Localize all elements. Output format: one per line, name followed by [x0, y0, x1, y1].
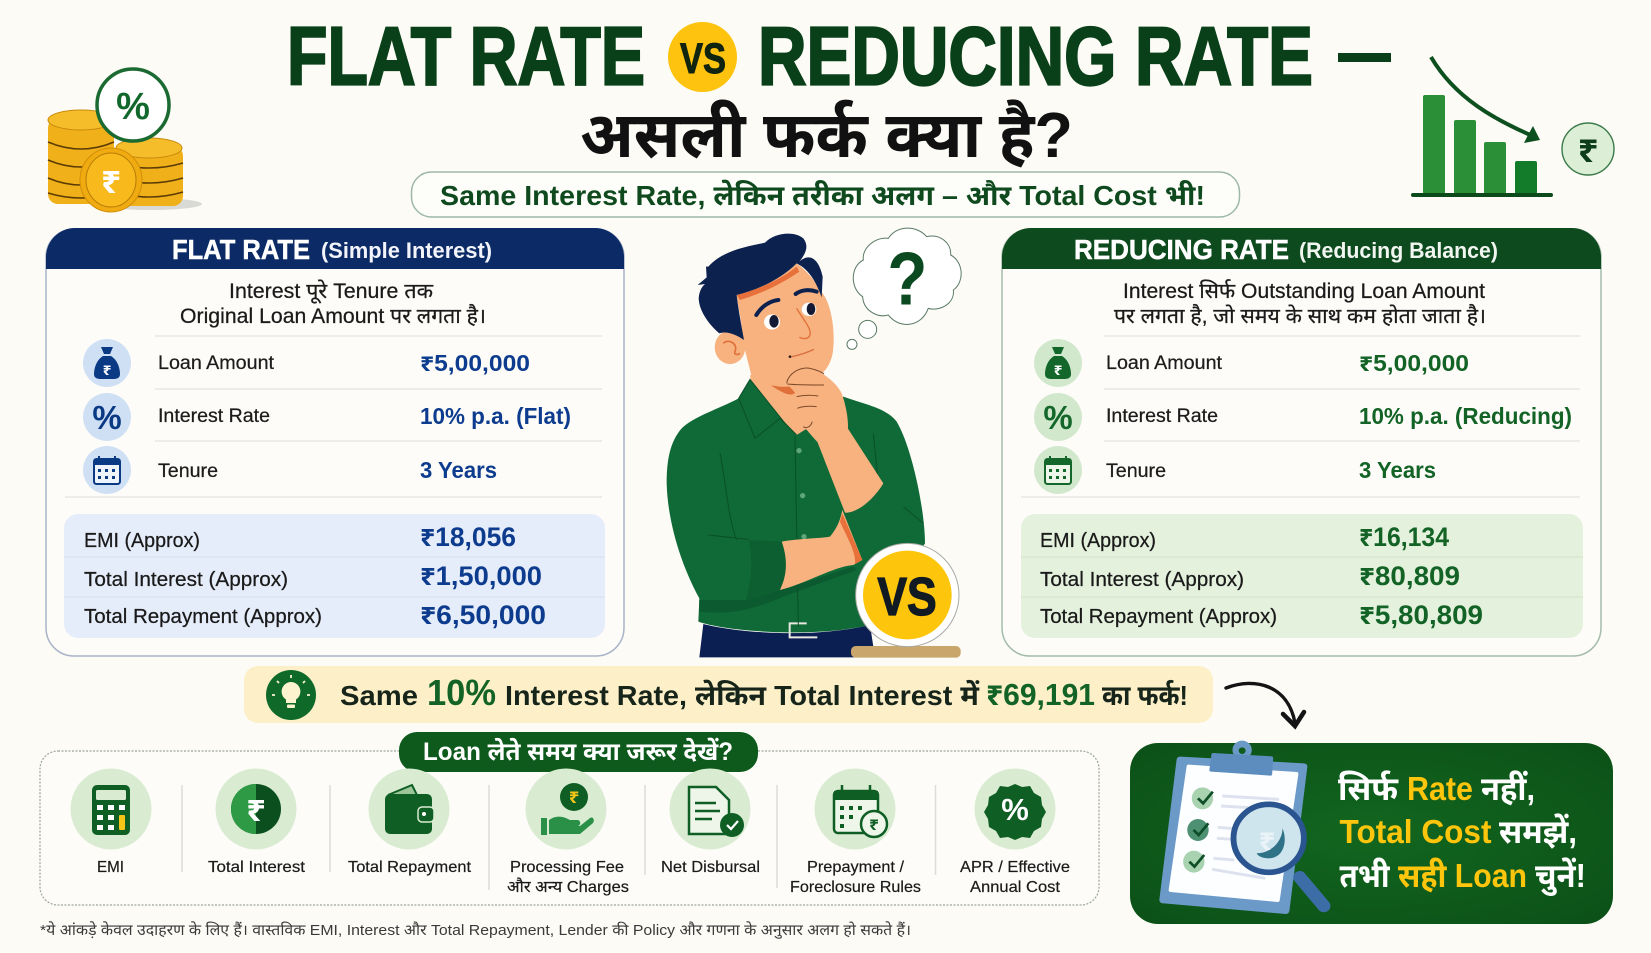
icon: percent	[1034, 393, 1082, 441]
flat rate header: (Simple Interest)	[321, 238, 492, 263]
front rupee coin: ₹	[101, 162, 121, 201]
collar	[739, 379, 797, 438]
item: total repayment	[348, 768, 472, 876]
icon: percent	[83, 393, 131, 441]
icon: calendar	[1034, 446, 1082, 494]
title: flat rate: FLAT RATE	[287, 10, 645, 102]
subtitle pill: Same Interest Rate, लेकिन तरीका अलग – और Total Cost भी!	[440, 178, 1205, 211]
reducing rate header	[1002, 228, 1601, 269]
item: processing fee	[507, 768, 629, 896]
item: prepayment rules: Foreclosure Rules	[790, 879, 921, 896]
reducing rate description: पर लगता है, जो समय के साथ कम होता जाता है।	[1114, 303, 1486, 328]
panel: flat rate	[46, 228, 624, 656]
right coin stack	[116, 138, 183, 206]
item: total repayment: Total Repayment	[348, 859, 472, 876]
reducing rate results box: ₹16,134	[1359, 522, 1449, 552]
flat rate results box: ₹1,50,000	[420, 561, 542, 591]
takeaway text: सही Loan	[1398, 857, 1527, 894]
reducing rate results box: ₹5,80,809	[1359, 600, 1483, 630]
icon: clipboard with magnifier: ₹	[1259, 825, 1275, 857]
item: total interest	[208, 768, 306, 876]
flat rate results box: Total Repayment (Approx)	[84, 606, 322, 628]
flat rate inputs: Interest Rate	[158, 406, 270, 427]
item: net disbursal: Net Disbursal	[661, 859, 760, 876]
title: reducing rate: REDUCING RATE	[758, 10, 1313, 102]
takeaway text: तभी	[1340, 857, 1391, 894]
icon: rupee circle: ₹	[1578, 129, 1598, 170]
icon: money bag	[83, 339, 131, 387]
item: apr	[960, 768, 1070, 896]
icon: vs badge small: VS	[680, 35, 726, 83]
face	[737, 263, 834, 387]
arrow: decline	[1431, 57, 1540, 143]
neck	[750, 375, 810, 435]
item: total interest: Total Interest	[208, 859, 306, 876]
thought bubble	[847, 228, 961, 349]
reducing rate results box: Total Interest (Approx)	[1040, 569, 1244, 591]
flat rate inputs	[158, 350, 571, 483]
reducing rate description: Interest सिर्फ Outstanding Loan Amount	[1123, 279, 1485, 303]
percent circle	[97, 69, 169, 141]
flat rate inputs: Tenure	[158, 461, 218, 482]
raised forearm and hand	[787, 368, 883, 513]
ear	[715, 331, 745, 364]
reducing rate header: (Reducing Balance)	[1299, 238, 1498, 263]
flat rate results box: EMI (Approx)	[84, 530, 200, 552]
icon: falling bar chart	[1411, 57, 1614, 197]
flat rate results box: ₹18,056	[420, 522, 516, 552]
illustration: thinking man	[667, 228, 961, 658]
reducing rate inputs: ₹5,00,000	[1359, 350, 1469, 376]
takeaway text: Rate	[1407, 770, 1473, 807]
reducing rate inputs: Loan Amount	[1106, 353, 1223, 374]
takeaway text: चुनें!	[1535, 857, 1586, 897]
flat rate results box: ₹6,50,000	[420, 600, 546, 630]
callout: interest difference: Interest Rate, लेकिन Total Interest में	[505, 678, 980, 711]
belt buckle	[790, 623, 817, 637]
eyes and brows	[756, 290, 817, 358]
flat rate inputs: 10% p.a. (Flat)	[420, 403, 571, 429]
reducing rate results box: ₹80,809	[1359, 561, 1460, 591]
icon: gold coins with percent	[48, 69, 202, 212]
reducing rate results box: EMI (Approx)	[1040, 530, 1156, 552]
icon: calendar	[83, 446, 131, 494]
icon: percent: %	[92, 399, 122, 436]
takeaway text: सिर्फ	[1338, 770, 1399, 807]
reducing rate results box: Total Repayment (Approx)	[1040, 606, 1277, 628]
item: EMI	[70, 768, 152, 876]
item: processing fee: ₹	[569, 787, 579, 807]
icon: money bag	[1034, 339, 1082, 387]
item: processing fee: Processing Fee	[510, 859, 624, 876]
shirt	[667, 379, 925, 632]
icon: vs badge small	[668, 22, 737, 92]
panel: what to check	[40, 732, 1099, 905]
item: prepayment rules: ₹	[869, 815, 879, 834]
item: prepayment rules: Prepayment /	[807, 859, 905, 876]
title dash	[1338, 53, 1391, 62]
icon: light bulb	[266, 670, 316, 720]
flat rate description: Original Loan Amount पर लगता है।	[180, 303, 486, 328]
reducing rate inputs: Interest Rate	[1106, 406, 1218, 427]
reducing rate description	[1114, 279, 1486, 328]
checklist heading: Loan लेते समय क्या जरूर देखें?	[423, 737, 733, 766]
vs badge: VS	[877, 568, 937, 627]
icon: money bag: ₹	[103, 362, 111, 379]
flat rate results box: Total Interest (Approx)	[84, 569, 288, 591]
flat rate inputs: Loan Amount	[158, 353, 275, 374]
title: hindi line: असली फर्क क्या है?	[580, 99, 1073, 171]
thought bubble: ?	[887, 236, 927, 320]
reducing rate inputs: 3 Years	[1359, 457, 1436, 483]
takeaway text: Total Cost	[1340, 813, 1492, 850]
item: apr: Annual Cost	[970, 879, 1061, 896]
shirt buttons	[796, 448, 807, 539]
flat rate header: FLAT RATE	[172, 234, 310, 265]
trousers	[699, 624, 875, 657]
flat rate description	[180, 279, 486, 328]
flat rate description: Interest पूरे Tenure तक	[229, 279, 434, 304]
arrow: curved to takeaway	[1226, 683, 1304, 726]
item: prepayment rules	[790, 768, 921, 896]
item: EMI: EMI	[97, 859, 124, 876]
takeaway text: नहीं,	[1481, 770, 1535, 807]
callout: interest difference: Same	[340, 680, 418, 711]
reducing rate header: REDUCING RATE	[1074, 234, 1289, 265]
panel: takeaway	[1130, 741, 1613, 924]
subtitle pill	[412, 172, 1240, 217]
left coin stack	[48, 110, 114, 204]
callout: interest difference: का फर्क!	[1102, 679, 1188, 711]
percent circle: %	[116, 86, 150, 128]
callout: interest difference	[244, 666, 1213, 723]
sleeve cuff	[746, 540, 786, 600]
reducing rate results box	[1021, 514, 1583, 638]
checklist heading	[399, 732, 758, 772]
callout: interest difference: ₹69,191	[986, 677, 1095, 712]
item: apr: %	[1001, 792, 1029, 827]
item: apr: APR / Effective	[960, 859, 1070, 876]
icon: clipboard with magnifier	[1163, 741, 1324, 911]
front rupee coin	[80, 148, 142, 212]
flat rate results box	[64, 514, 605, 638]
takeaway text	[1338, 770, 1586, 897]
reducing rate inputs	[1106, 350, 1572, 483]
reducing rate inputs: Tenure	[1106, 461, 1166, 482]
takeaway text: समझें,	[1499, 813, 1577, 850]
flat rate inputs: 3 Years	[420, 457, 497, 483]
hair	[698, 234, 823, 340]
flat rate inputs: ₹5,00,000	[420, 350, 530, 376]
icon: rupee circle	[1562, 123, 1614, 175]
item: net disbursal	[661, 768, 760, 876]
item: total interest: ₹	[246, 791, 266, 829]
footnote: *ये आंकड़े केवल उदाहरण के लिए हैं। वास्तविक EMI, Interest और Total Repayment, Lender की Policy और गणना के अनुसार अलग हो सकते हैं।	[40, 921, 911, 940]
callout: interest difference: 10%	[427, 672, 496, 713]
flat rate header	[46, 228, 624, 269]
panel: reducing rate	[1002, 228, 1601, 656]
wooden base	[851, 646, 961, 658]
title block	[287, 10, 1391, 171]
reducing rate inputs: 10% p.a. (Reducing)	[1359, 403, 1572, 429]
icon: money bag: ₹	[1054, 362, 1062, 379]
icon: percent: %	[1043, 399, 1073, 436]
folded forearm	[780, 510, 862, 590]
item: processing fee: और अन्य Charges	[507, 878, 629, 896]
vs badge	[856, 543, 959, 647]
